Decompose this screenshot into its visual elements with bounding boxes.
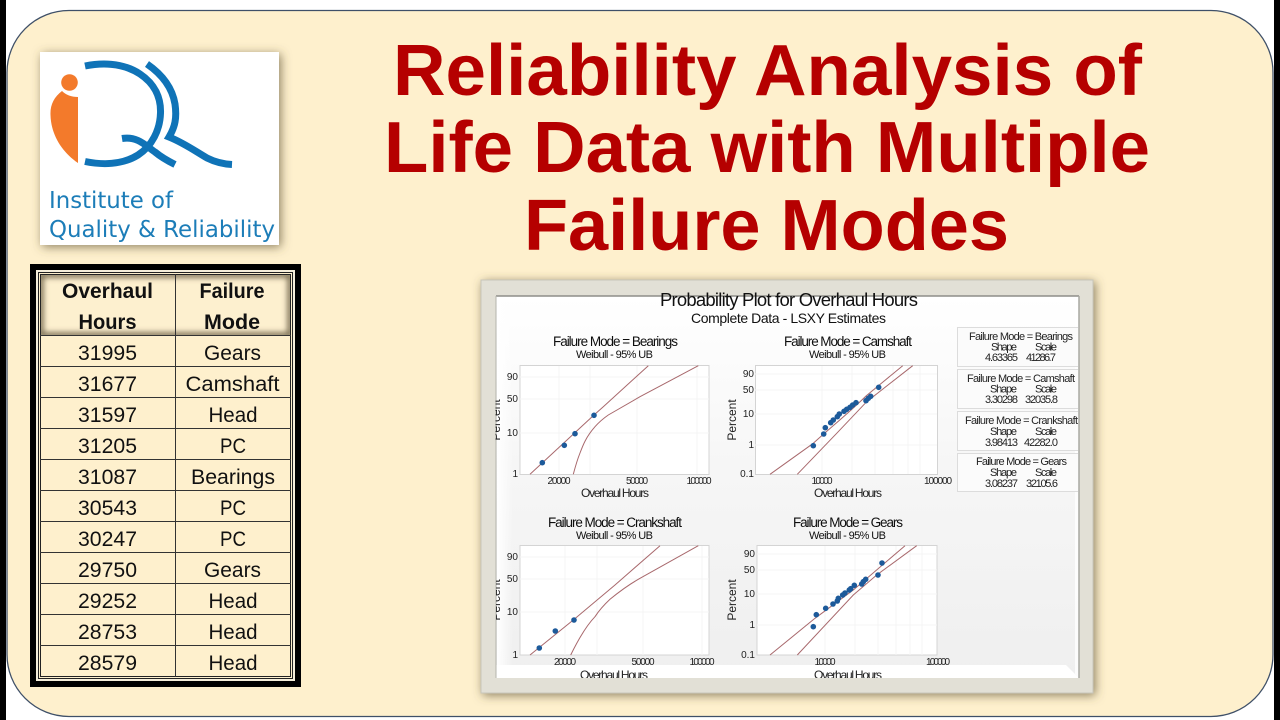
table rows: 30543 — [78, 497, 137, 520]
panel: Gears probability plot — [725, 515, 950, 682]
panel: Crankshaft probability plot: Weibull - 95% UB — [576, 530, 653, 542]
table rows: Head — [208, 621, 258, 644]
panel: Camshaft probability plot: Overhaul Hours — [814, 486, 882, 500]
table rows: Gears — [204, 342, 261, 365]
logo: Institute of Quality & Reliability — [40, 52, 279, 245]
chart title — [660, 289, 918, 326]
legend entry: Crankshaft — [958, 412, 1082, 450]
logo text: Quality & Reliability — [49, 217, 275, 243]
panel: Bearings probability plot: 10 — [507, 428, 518, 439]
legend entry: Bearings: 4.63365 — [985, 352, 1018, 364]
table rows: Head — [208, 590, 258, 613]
panel: Camshaft probability plot: 10 — [743, 409, 754, 420]
table rows: 29252 — [78, 590, 137, 613]
title — [384, 31, 1150, 266]
panel: Bearings probability plot: 20000 — [548, 476, 571, 487]
panel: Bearings probability plot: Failure Mode = Bearings — [553, 334, 678, 349]
table header row: Mode — [204, 311, 260, 334]
panel: Crankshaft probability plot: 90 — [507, 552, 518, 563]
panel: Crankshaft probability plot: Percent — [489, 579, 503, 621]
panel: Bearings probability plot — [489, 334, 712, 500]
panel: Crankshaft probability plot: Overhaul Hours — [580, 668, 648, 682]
panel: Gears probability plot: 100000 — [926, 657, 950, 668]
panel: Gears probability plot: Overhaul Hours — [814, 668, 882, 682]
table rows: Head — [208, 652, 258, 675]
legend entry: Camshaft: Scale — [1035, 384, 1057, 396]
panel: Gears probability plot: 0.1 — [741, 650, 755, 661]
table rows: 28753 — [78, 621, 137, 644]
panel: Camshaft probability plot: Weibull - 95% UB — [809, 349, 886, 361]
panel: Crankshaft probability plot: 100000 — [690, 657, 715, 668]
legend entry: Camshaft — [958, 370, 1082, 408]
panel: Gears probability plot: 50 — [744, 565, 755, 576]
legend entry: Gears: Shape — [990, 467, 1017, 479]
panel: Crankshaft probability plot: 1 — [512, 650, 518, 661]
table rows: Gears — [204, 559, 261, 582]
panel: Crankshaft probability plot: Failure Mode = Crankshaft — [548, 515, 682, 530]
panel: Gears probability plot: 10000 — [814, 657, 836, 668]
title: Reliability Analysis of — [393, 31, 1143, 111]
table rows: 31205 — [78, 435, 137, 458]
table rows: 31995 — [78, 342, 137, 365]
table header row: Overhaul — [62, 280, 153, 303]
panel: Gears probability plot: 10 — [744, 589, 755, 600]
table rows: 31087 — [78, 466, 137, 489]
legend entry: Camshaft: 32035.8 — [1025, 394, 1058, 406]
table rows: Head — [208, 404, 258, 427]
table rows: 31677 — [78, 373, 137, 396]
panel: Gears probability plot: 90 — [744, 549, 755, 560]
panel: Bearings probability plot: Weibull - 95% UB — [576, 349, 653, 361]
panel: Camshaft probability plot — [725, 334, 952, 500]
panel: Camshaft probability plot: Percent — [725, 399, 739, 441]
icon: orange i — [50, 74, 78, 163]
icon: blue Q and L curves — [85, 64, 232, 164]
chart title: Complete Data - LSXY Estimates — [691, 310, 886, 326]
table grid lines — [40, 274, 291, 677]
panel: Camshaft probability plot: 100000 — [924, 476, 952, 487]
panel: Bearings probability plot: Overhaul Hours — [581, 486, 649, 500]
panel: Bearings probability plot: 50 — [507, 394, 518, 405]
table rows: 31597 — [78, 404, 137, 427]
title: Failure Modes — [524, 186, 1009, 266]
legend entry: Gears: Failure Mode = Gears — [976, 456, 1068, 468]
panel: Camshaft probability plot: 0.1 — [740, 469, 754, 480]
legend entry: Bearings: Scale — [1035, 342, 1057, 354]
table frame — [33, 267, 298, 684]
panel: Camshaft probability plot: 50 — [743, 385, 754, 396]
panel: Bearings probability plot: 1 — [512, 469, 518, 480]
legend entry: Crankshaft: 3.98413 — [985, 437, 1018, 449]
panel: Gears probability plot: Weibull - 95% UB — [809, 530, 886, 542]
legend entry: Gears: Scale — [1035, 467, 1057, 479]
legend entry: Camshaft: Shape — [990, 384, 1017, 396]
table rows: Camshaft — [186, 373, 280, 396]
panel: Camshaft probability plot: 1 — [748, 440, 754, 451]
table rows: PC — [220, 528, 246, 551]
legend entry: Bearings: Shape — [991, 342, 1017, 354]
legend entry: Bearings: 41286.7 — [1026, 352, 1056, 364]
panel: Camshaft probability plot: Failure Mode = Camshaft — [784, 334, 912, 349]
panel: Bearings probability plot: 90 — [507, 372, 518, 383]
framed probability plot — [481, 280, 1093, 693]
panel: Crankshaft probability plot — [489, 515, 715, 682]
panel: Bearings probability plot: Percent — [489, 399, 503, 441]
data table — [33, 267, 298, 684]
logo text: Institute of — [49, 188, 174, 214]
panel: Bearings probability plot: 100000 — [686, 476, 712, 487]
table header row: Failure — [200, 280, 264, 303]
panel: Gears probability plot: Failure Mode = Gears — [793, 515, 903, 530]
legend entry: Crankshaft: 42282.0 — [1024, 437, 1058, 449]
panel: Gears probability plot: Percent — [725, 579, 739, 621]
panel: Gears probability plot: 1 — [749, 620, 755, 631]
title: Life Data with Multiple — [384, 108, 1150, 188]
legend entry: Gears: 3.08237 — [985, 478, 1018, 490]
table rows: PC — [220, 497, 246, 520]
panel: Crankshaft probability plot: 10 — [507, 607, 518, 618]
panel: Crankshaft probability plot: 20000 — [554, 657, 576, 668]
table header row: Hours — [78, 311, 136, 334]
legend entry: Crankshaft: Scale — [1035, 426, 1057, 438]
table rows: PC — [220, 435, 246, 458]
panel: Camshaft probability plot: 90 — [743, 369, 754, 380]
logo text — [49, 188, 275, 243]
panel: Crankshaft probability plot: 50000 — [632, 657, 655, 668]
panel: Crankshaft probability plot: 50 — [507, 574, 518, 585]
legend entry: Bearings: Failure Mode = Bearings — [969, 331, 1074, 343]
legend entry: Crankshaft: Shape — [990, 426, 1017, 438]
legend entry: Gears: 32105.6 — [1026, 478, 1058, 490]
legend entry: Camshaft: 3.30298 — [985, 394, 1018, 406]
legend entry: Crankshaft: Failure Mode = Crankshaft — [965, 415, 1078, 427]
legend entry: Gears — [958, 454, 1082, 492]
table rows: Bearings — [191, 466, 275, 489]
legend entry: Bearings — [958, 328, 1082, 366]
picture frame — [481, 280, 1093, 693]
table rows: 30247 — [78, 528, 137, 551]
table rows — [78, 342, 280, 675]
table rows: 28579 — [78, 652, 137, 675]
legend entry: Camshaft: Failure Mode = Camshaft — [967, 373, 1075, 385]
table rows: 29750 — [78, 559, 137, 582]
panel: Bearings probability plot: 50000 — [626, 476, 648, 487]
panel: Camshaft probability plot: 10000 — [812, 476, 833, 487]
legend: Weibull parameters — [958, 328, 1082, 492]
chart title: Probability Plot for Overhaul Hours — [660, 289, 918, 310]
table header row — [41, 275, 290, 335]
